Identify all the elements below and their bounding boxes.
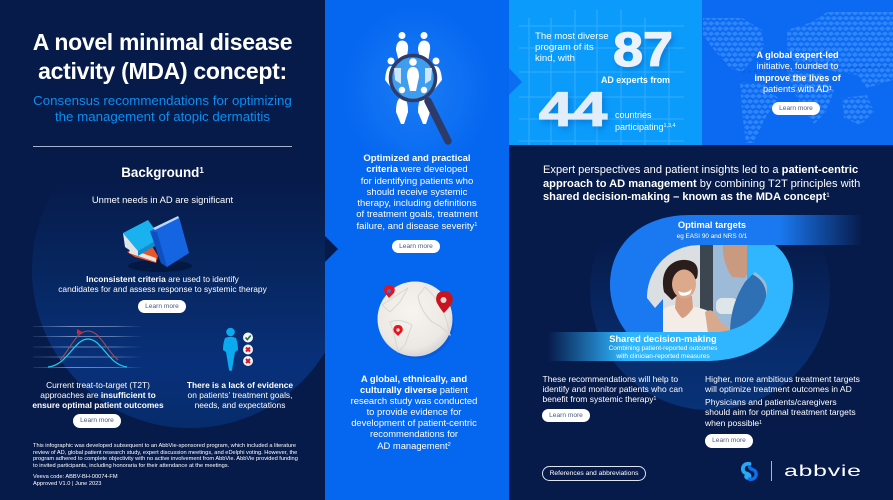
disclosure text: review of AD, global patient research study, expert discussion meetings, and eDelphi voting. However, the [33, 450, 297, 456]
veeva code and approval: Approved V1.0 | June 2023 [33, 481, 101, 487]
panel: global expert-led initiative [702, 0, 893, 145]
criteria text: of treatment goals, treatment [356, 209, 478, 220]
lede heading: shared decision-making – known as the MDA concept1 [543, 191, 830, 203]
criteria text [356, 153, 478, 232]
logo divider [771, 461, 772, 481]
patient research text: development of patient-centric [351, 417, 477, 428]
number: 87 experts: 87 [613, 24, 672, 77]
subtitle: Consensus recommendations for optimizing [33, 93, 292, 108]
button: learn more: Learn more [399, 243, 433, 250]
criteria text: failure, and disease severity1 [357, 221, 477, 232]
physicians guidance text: should aim for optimal treatment targets [705, 407, 856, 417]
divider rule [33, 146, 292, 147]
criteria text: Optimized and practical [363, 153, 471, 164]
panel: background and unmet needs [0, 0, 325, 500]
button: learn more [392, 240, 440, 253]
intro text: The most diverse [535, 31, 609, 42]
intro text: kind, with [535, 53, 575, 64]
lack of evidence text: There is a lack of evidence [187, 380, 293, 390]
physicians guidance text: Physicians and patients/caregivers [705, 397, 837, 407]
panel: program statistics [509, 0, 702, 145]
T2T text: Current treat-to-target (T2T) [46, 380, 150, 390]
physicians guidance text [705, 397, 856, 428]
icon: globe with location pins [378, 282, 454, 359]
icon: stack of books [123, 216, 192, 272]
inconsistent criteria text [58, 274, 267, 294]
criteria text: therapy, including definitions [357, 198, 477, 209]
ambitious targets text: Higher, more ambitious treatment targets [705, 374, 860, 384]
disclosure text: to invited participants, including honoraria for their attendance at the meetings. [33, 463, 229, 469]
recommendations text [542, 374, 683, 404]
recommendations text: These recommendations will help to [542, 374, 678, 384]
hexagon world map [703, 12, 893, 143]
chart: treat-to-target curves [33, 326, 140, 368]
recommendations text: identify and monitor patients who can [542, 384, 683, 394]
logo mark [741, 462, 758, 481]
patient research text: AD management2 [377, 440, 451, 451]
patient research text [351, 373, 477, 451]
button: learn more [73, 414, 121, 428]
disclosure text: program adhered to complete objectivity with no active involvement from AbbVie. AbbVie provided funding [33, 456, 298, 462]
button: learn more [772, 102, 820, 115]
patient research text: research study was conducted [351, 395, 477, 406]
veeva code and approval [33, 474, 118, 487]
T2T text [32, 380, 164, 410]
T2T text: approaches are insufficient to [40, 390, 156, 400]
title [33, 29, 292, 84]
button: references and abbreviations [542, 466, 646, 481]
experts label: AD experts from [601, 75, 670, 85]
button: learn more [138, 300, 186, 313]
initiative text: initiative, founded to [757, 61, 838, 71]
intro text: program of its [535, 42, 594, 53]
inconsistent criteria text: candidates for and assess response to systemic therapy [58, 284, 267, 294]
label: shared decision-making: with clinician-reported measures [616, 353, 710, 360]
label: optimal targets: eg EASI 90 and NRS 0/1 [677, 233, 747, 240]
lede heading [543, 164, 860, 203]
button: learn more: Learn more [80, 417, 114, 424]
button: learn more: Learn more [779, 105, 813, 112]
countries label: countries [615, 110, 652, 120]
button: learn more [542, 409, 590, 422]
chevron pointer [325, 236, 338, 262]
criteria text: should receive systemic [367, 187, 467, 198]
patient research text: recommendations for [370, 428, 458, 439]
label: optimal targets: Optimal targets [678, 220, 746, 230]
ambitious targets text: will optimize treatment outcomes in AD [705, 384, 852, 394]
button: references and abbreviations: References and abbreviations [550, 470, 638, 477]
subtitle [33, 93, 292, 124]
label: optimal targets [676, 220, 747, 240]
T2T text: ensure optimal patient outcomes [32, 400, 164, 410]
heading: background: Background1 [121, 165, 204, 180]
inconsistent criteria text: Inconsistent criteria are used to identify [86, 274, 239, 284]
patient research text: culturally diverse patient [360, 384, 468, 395]
number: 44 countries: 44 [539, 84, 607, 137]
lack of evidence text: on patients’ treatment goals, [188, 390, 292, 400]
button: learn more [705, 434, 753, 448]
lack of evidence text [186, 380, 293, 410]
recommendations text: benefit from systemic therapy1 [542, 394, 656, 404]
patient research text: to provide evidence for [367, 406, 461, 417]
button: learn more: Learn more [549, 412, 583, 419]
logo wordmark: abbvie [784, 463, 862, 480]
lede heading: Expert perspectives and patient insights led to a patient-centric [543, 164, 858, 176]
criteria text: criteria were developed [366, 164, 468, 175]
logo: abbvie [741, 461, 862, 481]
lack of evidence text: needs, and expectations [195, 400, 285, 410]
initiative text: improve the lives of [754, 72, 841, 82]
criteria text: for identifying patients who [361, 176, 473, 187]
veeva code and approval: Veeva code: ABBV-BH-00074-FM [33, 474, 118, 480]
grid lines backdrop [509, 10, 684, 145]
lede heading: approach to AD management by combining T2T principles with [543, 178, 860, 190]
physicians guidance text: when possible1 [705, 418, 762, 428]
subtitle: the management of atopic dermatitis [55, 109, 270, 124]
countries label [615, 110, 676, 132]
icon: person with check and cross badges [223, 328, 253, 371]
initiative text [754, 50, 841, 94]
patient research text: A global, ethnically, and [361, 373, 467, 384]
label: shared decision-making [608, 334, 718, 360]
ambitious targets text [705, 374, 860, 394]
disclosure text: This infographic was developed subsequent to an AbbVie-sponsored program, which included a literature [33, 443, 296, 449]
title: A novel minimal disease [33, 29, 292, 55]
initiative text: patients with AD1 [763, 84, 832, 94]
glow circle behind background section [32, 112, 348, 428]
diagram: MDA cycle with photo [552, 215, 858, 410]
panel: criteria and patient research [325, 0, 509, 500]
label: shared decision-making: Combining patient-reported outcomes [609, 345, 717, 352]
button: learn more: Learn more [712, 437, 746, 444]
label: shared decision-making: Shared decision-making [609, 334, 717, 344]
icon: magnifying glass over people [385, 32, 452, 145]
disclosure text [33, 443, 298, 469]
panel: MDA concept [542, 165, 860, 481]
countries label: participating1,3,4 [615, 122, 676, 132]
button: learn more: Learn more [145, 303, 179, 310]
initiative text: A global expert-led [756, 50, 839, 60]
intro text [535, 31, 609, 64]
unmet needs statement: Unmet needs in AD are significant [92, 194, 233, 205]
title: activity (MDA) concept: [38, 58, 287, 84]
